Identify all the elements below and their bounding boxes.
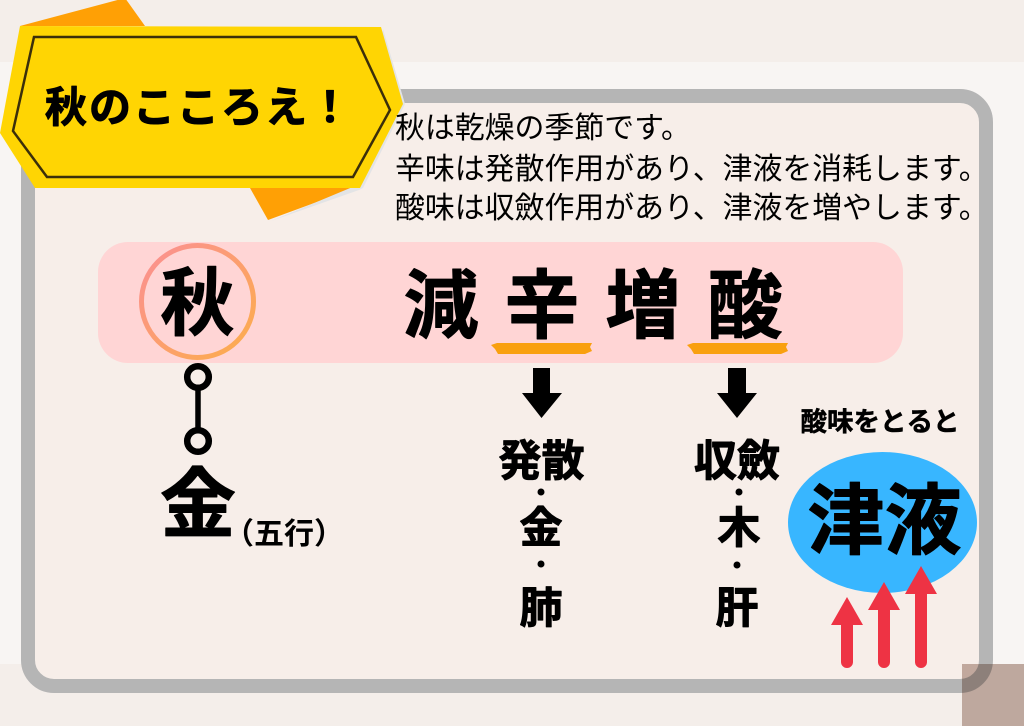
label: 金（五行）: 金 bbox=[160, 463, 236, 548]
arrow 2 bbox=[868, 582, 900, 668]
column: 収斂・木・肝: 肝 bbox=[716, 585, 758, 633]
heading: 減辛増酸: 増 bbox=[605, 264, 681, 348]
column: 発散・金・肺: 発散 bbox=[498, 438, 584, 486]
arrow: 酸 down bbox=[717, 368, 757, 418]
arrow: 辛 down bbox=[522, 368, 562, 418]
column: 発散・金・肺: 肺 bbox=[520, 585, 562, 633]
underline: 辛 bbox=[491, 343, 592, 354]
panel: main frame bbox=[28, 96, 986, 686]
intro text: 酸味は収斂作用があり、津液を増やします。 bbox=[395, 192, 989, 225]
ellipse: 津液: 津液 bbox=[808, 479, 962, 565]
arrows: increase bbox=[831, 566, 937, 668]
intro text: 辛味は発散作用があり、津液を消耗します。 bbox=[395, 153, 989, 186]
intro text bbox=[395, 112, 989, 225]
intro text: 秋は乾燥の季節です。 bbox=[395, 112, 691, 145]
title badge bbox=[0, 0, 405, 221]
corner square bbox=[962, 664, 1024, 726]
heading: 減辛増酸 bbox=[403, 264, 783, 348]
connector: 秋 to 金 bbox=[187, 366, 209, 452]
column: 収斂・木・肝 bbox=[694, 438, 780, 633]
arrow 1 bbox=[831, 597, 863, 668]
column: 発散・金・肺: 金 bbox=[520, 505, 562, 553]
circle: 秋: 秋 bbox=[160, 262, 234, 345]
label: 金（五行） bbox=[160, 463, 344, 551]
caption: 酸味をとると: 酸味をとると bbox=[800, 407, 960, 437]
ellipse: 津液 bbox=[788, 452, 977, 593]
title text: 秋のこころえ！ bbox=[45, 84, 353, 131]
column: 収斂・木・肝: 木 bbox=[718, 505, 760, 553]
circle: 秋 bbox=[142, 246, 254, 358]
heading: 減辛増酸: 辛 bbox=[504, 264, 580, 348]
underline: 酸 bbox=[687, 343, 788, 354]
arrow 3 bbox=[905, 566, 937, 668]
label: 金（五行）: （五行） bbox=[224, 518, 344, 551]
heading: 減辛増酸: 減 bbox=[403, 264, 479, 348]
heading: 減辛増酸: 酸 bbox=[707, 264, 783, 348]
column: 収斂・木・肝: 収斂 bbox=[694, 438, 780, 486]
column: 発散・金・肺 bbox=[498, 438, 584, 633]
pink band: 秋 減辛増酸 bbox=[98, 242, 903, 363]
